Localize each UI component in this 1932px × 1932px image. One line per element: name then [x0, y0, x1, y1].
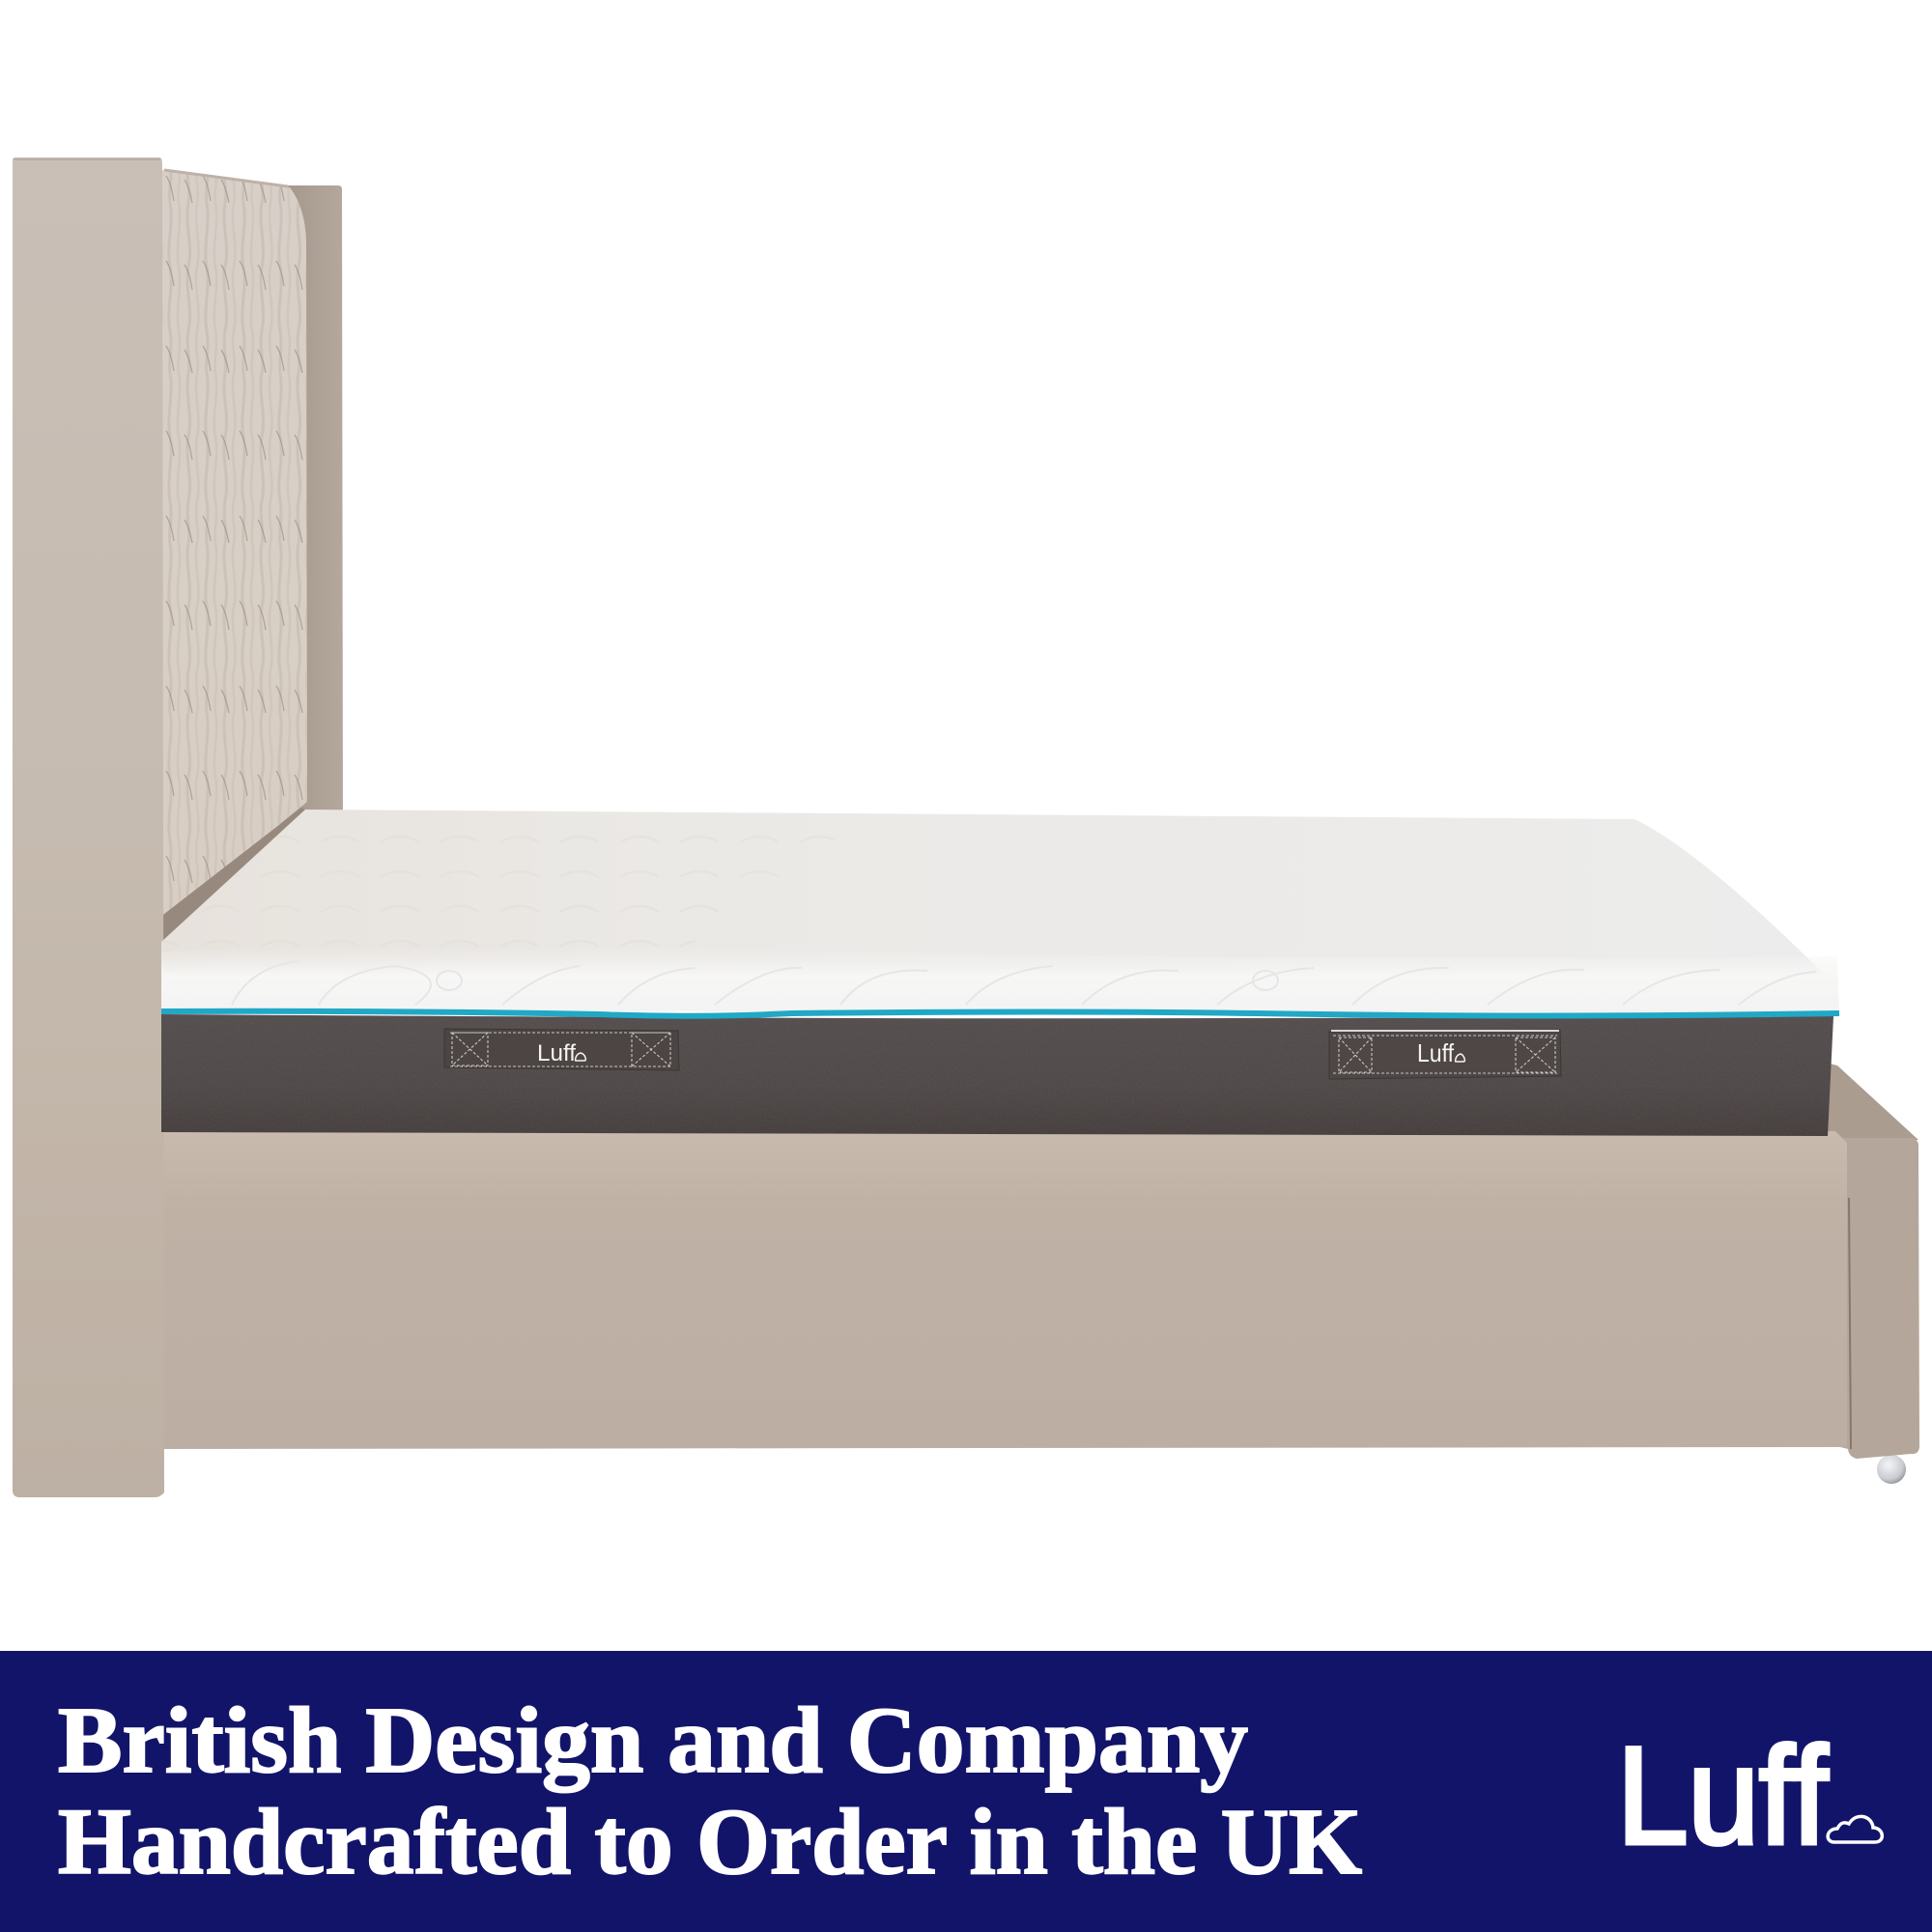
teal piping — [161, 1011, 1839, 1016]
headline: British Design and Company — [58, 1689, 1248, 1792]
tufted headboard — [159, 170, 311, 947]
banner — [0, 1651, 1932, 1932]
icon: cloud — [1828, 1816, 1882, 1842]
quilting texture — [161, 810, 869, 956]
left mattress label — [444, 1029, 679, 1070]
woven leaf detail — [232, 961, 1816, 1005]
castor wheel — [1877, 1455, 1906, 1484]
headline: Handcrafted to Order in the UK — [58, 1790, 1362, 1893]
headline — [58, 1689, 1362, 1893]
headboard back panel — [280, 185, 343, 831]
label wordmark: Luff — [1417, 1038, 1455, 1067]
mattress front edge — [161, 947, 1839, 1012]
dark mattress border — [161, 1012, 1835, 1138]
mattress top surface — [161, 810, 1839, 1012]
bed illustration — [13, 157, 1919, 1497]
base end cap and rear slope — [1826, 1063, 1919, 1459]
headboard side wing — [13, 157, 164, 1497]
label wordmark: Luff — [537, 1040, 576, 1066]
right mattress label — [1329, 1030, 1561, 1079]
mattress — [161, 810, 1839, 1138]
Luff logo: Luff — [1617, 1719, 1828, 1873]
bed base — [155, 1131, 1847, 1449]
